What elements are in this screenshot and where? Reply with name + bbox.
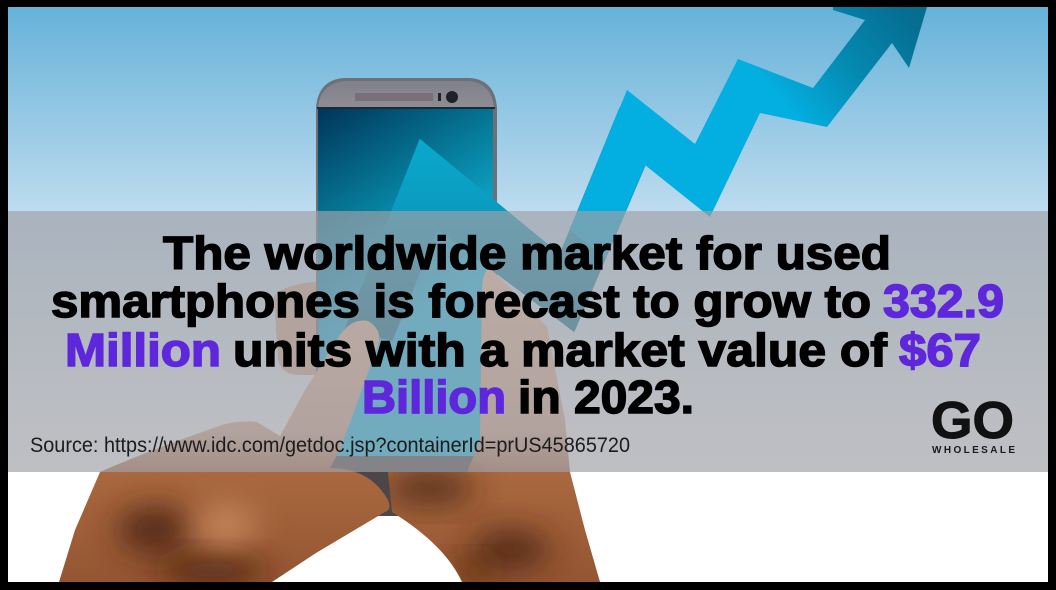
sky gradient — [8, 7, 1048, 472]
headline: Billion — [362, 371, 506, 423]
logo: GO Wholesale: GO — [931, 392, 1014, 450]
headline: Million — [65, 324, 221, 376]
icon: rising arrow upper section — [570, 7, 927, 258]
headline: in 2023. — [518, 371, 694, 423]
source line: Source: https://www.idc.com/getdoc.jsp?containerId=prUS45865720 — [30, 434, 630, 457]
headline: units with a market value of — [233, 324, 888, 376]
logo: GO Wholesale: WHOLESALE — [932, 445, 1015, 456]
icon: rising arrow lower band — [345, 108, 645, 340]
left hand — [59, 321, 389, 582]
left hand back fingers — [274, 282, 316, 375]
headline — [51, 227, 1004, 423]
lower white backdrop — [8, 472, 1048, 582]
headline: The worldwide market for used — [163, 227, 891, 279]
icon: smartphone — [316, 78, 497, 516]
right hand — [385, 269, 600, 582]
headline: smartphones is forecast to grow to — [51, 275, 871, 327]
panel: translucent grey text band — [8, 211, 1048, 472]
headline: $67 — [899, 324, 981, 376]
headline: 332.9 — [883, 275, 1004, 327]
